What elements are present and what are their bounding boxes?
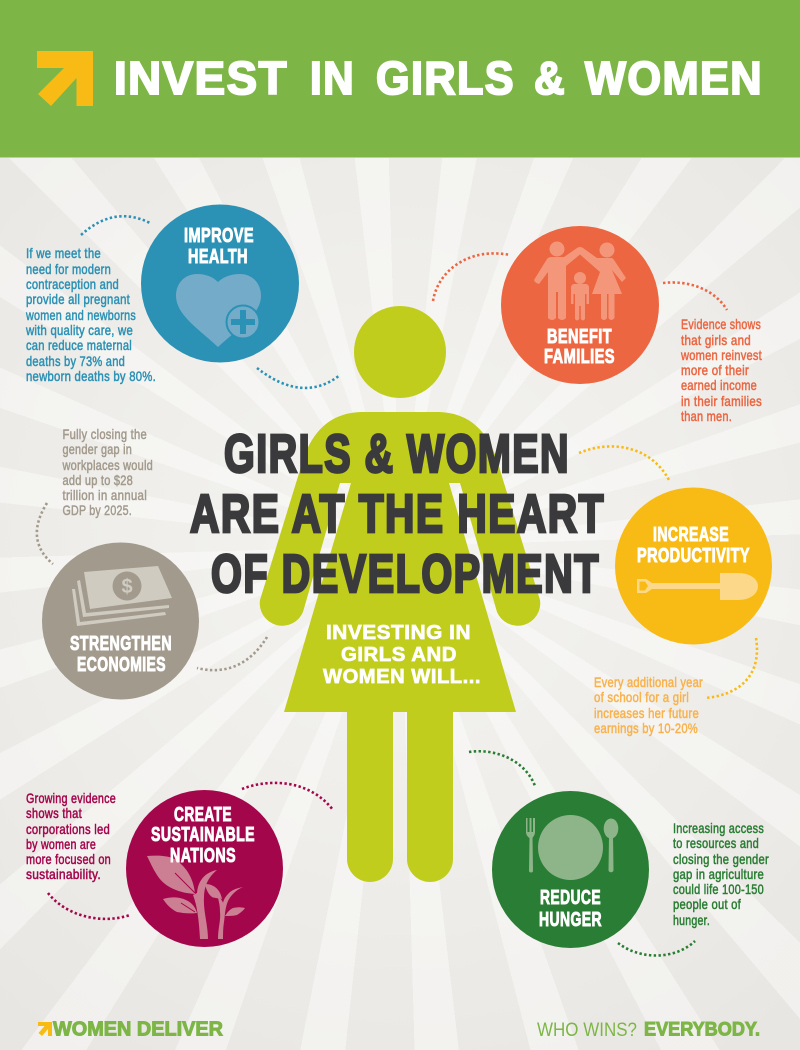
heading: improve health: IMPROVE bbox=[184, 225, 254, 247]
subheading inside dress bbox=[323, 622, 481, 688]
text: create sustainable nations: corporations led bbox=[26, 821, 110, 837]
text: create sustainable nations: sustainability. bbox=[26, 866, 101, 882]
panel: reduce hunger bbox=[492, 791, 649, 948]
heading: benefit families: FAMILIES bbox=[544, 346, 615, 368]
text: strengthen economies: trillion in annual bbox=[62, 487, 147, 503]
central figure of a woman bbox=[260, 306, 540, 882]
heading: reduce hunger: HUNGER bbox=[539, 909, 602, 931]
main heading: OF DEVELOPMENT bbox=[211, 544, 600, 604]
text: create sustainable nations: shows that bbox=[26, 805, 82, 821]
icon: family under a roof bbox=[534, 242, 626, 320]
panel: strengthen economies bbox=[42, 542, 199, 700]
heading: strengthen economies: ECONOMIES bbox=[77, 654, 166, 676]
text: benefit families: Evidence shows bbox=[681, 316, 761, 332]
text: benefit families: than men. bbox=[681, 408, 732, 424]
text: reduce hunger: closing the gender bbox=[673, 851, 769, 867]
text: reduce hunger: to resources and bbox=[673, 835, 759, 851]
text: increase productivity bbox=[594, 674, 703, 736]
text: increase productivity: earnings by 10-20% bbox=[594, 720, 698, 736]
title bbox=[114, 52, 763, 104]
heading: benefit families: BENEFIT bbox=[547, 326, 612, 348]
main heading bbox=[190, 424, 605, 604]
title: WOMEN bbox=[585, 52, 763, 104]
heading: strengthen economies bbox=[70, 633, 172, 676]
text: create sustainable nations: by women are bbox=[26, 836, 96, 852]
text: reduce hunger: hunger. bbox=[673, 912, 710, 928]
footer logo: women deliver: WOMEN DELIVER bbox=[53, 1018, 224, 1040]
text: strengthen economies: gender gap in bbox=[62, 441, 132, 457]
text: increase productivity: increases her future bbox=[594, 705, 699, 721]
icon: plate and cutlery bbox=[526, 815, 618, 880]
text: reduce hunger bbox=[673, 820, 769, 928]
text: improve health: women and newborns bbox=[25, 307, 136, 323]
text: reduce hunger: people out of bbox=[673, 896, 741, 912]
text: increase productivity: of school for a girl bbox=[594, 689, 689, 705]
connector: improve health bbox=[81, 216, 340, 388]
text: reduce hunger: Increasing access bbox=[673, 820, 764, 836]
footer tagline: WHO WINS? bbox=[537, 1020, 637, 1041]
text: strengthen economies: add up to $28 bbox=[62, 472, 133, 488]
text: improve health: If we meet the bbox=[26, 245, 101, 261]
footer tagline bbox=[537, 1020, 760, 1041]
heading: create sustainable nations: CREATE bbox=[174, 804, 232, 826]
icon: heart with plus bbox=[176, 274, 261, 347]
text: create sustainable nations: more focused on bbox=[26, 851, 111, 867]
text: create sustainable nations: Growing evidence bbox=[26, 790, 116, 806]
text: strengthen economies: Fully closing the bbox=[62, 426, 147, 442]
subheading inside dress: GIRLS AND bbox=[341, 644, 457, 666]
icon: plant bbox=[147, 856, 245, 939]
heading: benefit families bbox=[544, 326, 615, 368]
text: improve health: need for modern bbox=[26, 261, 111, 277]
heading: create sustainable nations bbox=[151, 804, 255, 867]
heading: increase productivity: PRODUCTIVITY bbox=[637, 545, 750, 567]
text: create sustainable nations bbox=[26, 790, 116, 882]
panel: create sustainable nations bbox=[126, 790, 283, 947]
main heading: GIRLS & WOMEN bbox=[224, 424, 570, 484]
connector: strengthen economies bbox=[37, 503, 267, 670]
title: & bbox=[534, 52, 566, 104]
text: improve health: provide all pregnant bbox=[26, 291, 130, 307]
text: strengthen economies bbox=[62, 426, 153, 518]
text: reduce hunger: could life 100-150 bbox=[673, 881, 764, 897]
text: benefit families: in their families bbox=[681, 393, 762, 409]
text: improve health bbox=[25, 245, 156, 384]
heading: strengthen economies: STRENGTHEN bbox=[70, 633, 172, 655]
connector: increase productivity bbox=[579, 446, 757, 698]
footer tagline: EVERYBODY. bbox=[644, 1020, 760, 1040]
icon: stack of money: $ bbox=[121, 576, 133, 598]
text: strengthen economies: workplaces would bbox=[62, 457, 153, 473]
header banner bbox=[0, 0, 800, 158]
heading: increase productivity: INCREASE bbox=[653, 524, 729, 546]
connector: benefit families bbox=[433, 253, 727, 310]
icon: shovel bbox=[637, 573, 758, 600]
main heading: ARE AT THE HEART bbox=[190, 484, 605, 544]
title: INVEST bbox=[114, 52, 288, 104]
connector: create sustainable nations bbox=[48, 783, 333, 919]
connector: reduce hunger bbox=[469, 751, 695, 956]
text: improve health: with quality care, we bbox=[25, 322, 133, 338]
heading: create sustainable nations: SUSTAINABLE bbox=[151, 824, 255, 846]
heading: increase productivity bbox=[637, 524, 750, 567]
panel: benefit families bbox=[501, 226, 659, 384]
heading: improve health: HEALTH bbox=[188, 246, 248, 268]
text: benefit families bbox=[680, 316, 762, 424]
panel: improve health bbox=[141, 204, 299, 362]
text: benefit families: women reinvest bbox=[680, 347, 762, 363]
icon: yellow arrow logo bbox=[37, 51, 93, 106]
icon: stack of money bbox=[72, 566, 172, 626]
heading: create sustainable nations: NATIONS bbox=[170, 845, 236, 867]
title: IN bbox=[310, 52, 355, 104]
text: improve health: deaths by 73% and bbox=[26, 353, 125, 369]
text: improve health: can reduce maternal bbox=[26, 337, 132, 353]
text: benefit families: that girls and bbox=[681, 332, 751, 348]
panel: increase productivity bbox=[615, 488, 772, 644]
text: reduce hunger: gap in agriculture bbox=[673, 866, 764, 882]
text: increase productivity: Every additional year bbox=[594, 674, 703, 690]
text: benefit families: more of their bbox=[681, 362, 749, 378]
title: GIRLS bbox=[376, 52, 515, 104]
text: improve health: contraception and bbox=[26, 276, 119, 292]
heading: improve health bbox=[184, 225, 254, 268]
heading: reduce hunger bbox=[539, 887, 602, 931]
text: benefit families: earned income bbox=[681, 377, 757, 393]
subheading inside dress: INVESTING IN bbox=[326, 622, 471, 644]
subheading inside dress: WOMEN WILL... bbox=[323, 666, 481, 688]
text: strengthen economies: GDP by 2025. bbox=[62, 502, 132, 518]
heading: reduce hunger: REDUCE bbox=[540, 887, 601, 909]
text: improve health: newborn deaths by 80%. bbox=[26, 368, 156, 384]
